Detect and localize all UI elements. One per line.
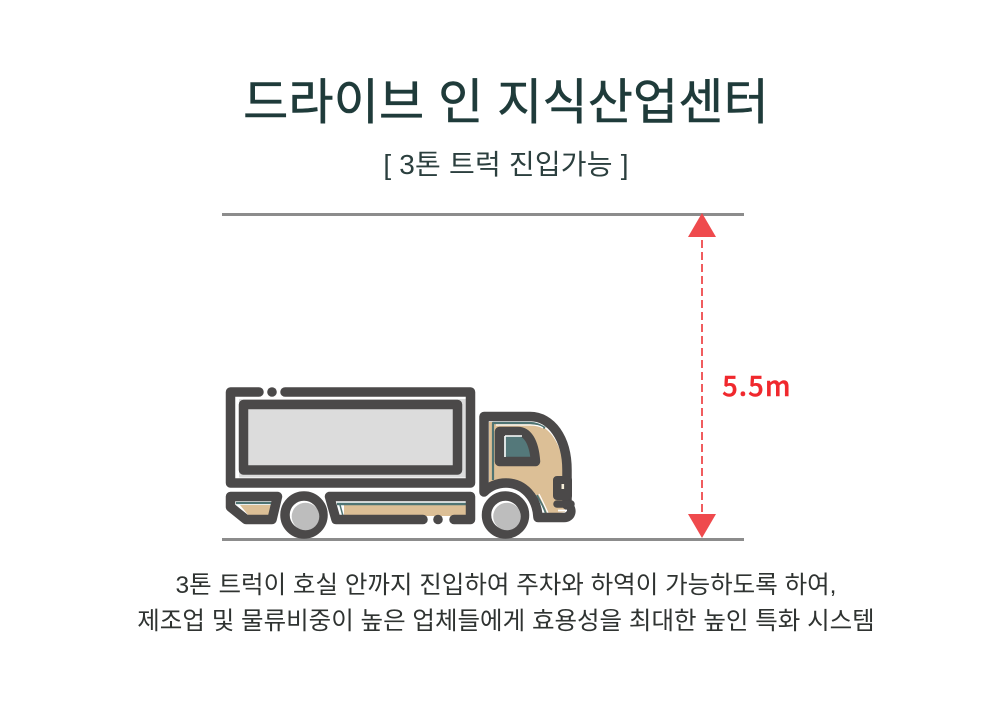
subtitle: [ 3톤 트럭 진입가능 ] xyxy=(383,149,629,180)
side chassis xyxy=(330,496,470,524)
description line 1: 3톤 트럭이 호실 안까지 진입하여 주차와 하역이 가능하도록 하여, xyxy=(176,572,836,599)
rear chassis guard xyxy=(230,496,278,520)
title: 드라이브 인 지식산업센터 xyxy=(243,76,769,130)
cargo box xyxy=(230,387,470,483)
height arrow xyxy=(688,213,716,538)
height label: 5.5m xyxy=(722,365,792,404)
cab window xyxy=(500,432,536,462)
front wheel xyxy=(486,496,524,534)
cab xyxy=(484,416,571,518)
rear wheel xyxy=(285,496,323,534)
truck icon xyxy=(230,387,571,534)
headlight xyxy=(557,480,568,496)
description line 2: 제조업 및 물류비중이 높은 업체들에게 효용성을 최대한 높인 특화 시스템 xyxy=(137,608,875,635)
